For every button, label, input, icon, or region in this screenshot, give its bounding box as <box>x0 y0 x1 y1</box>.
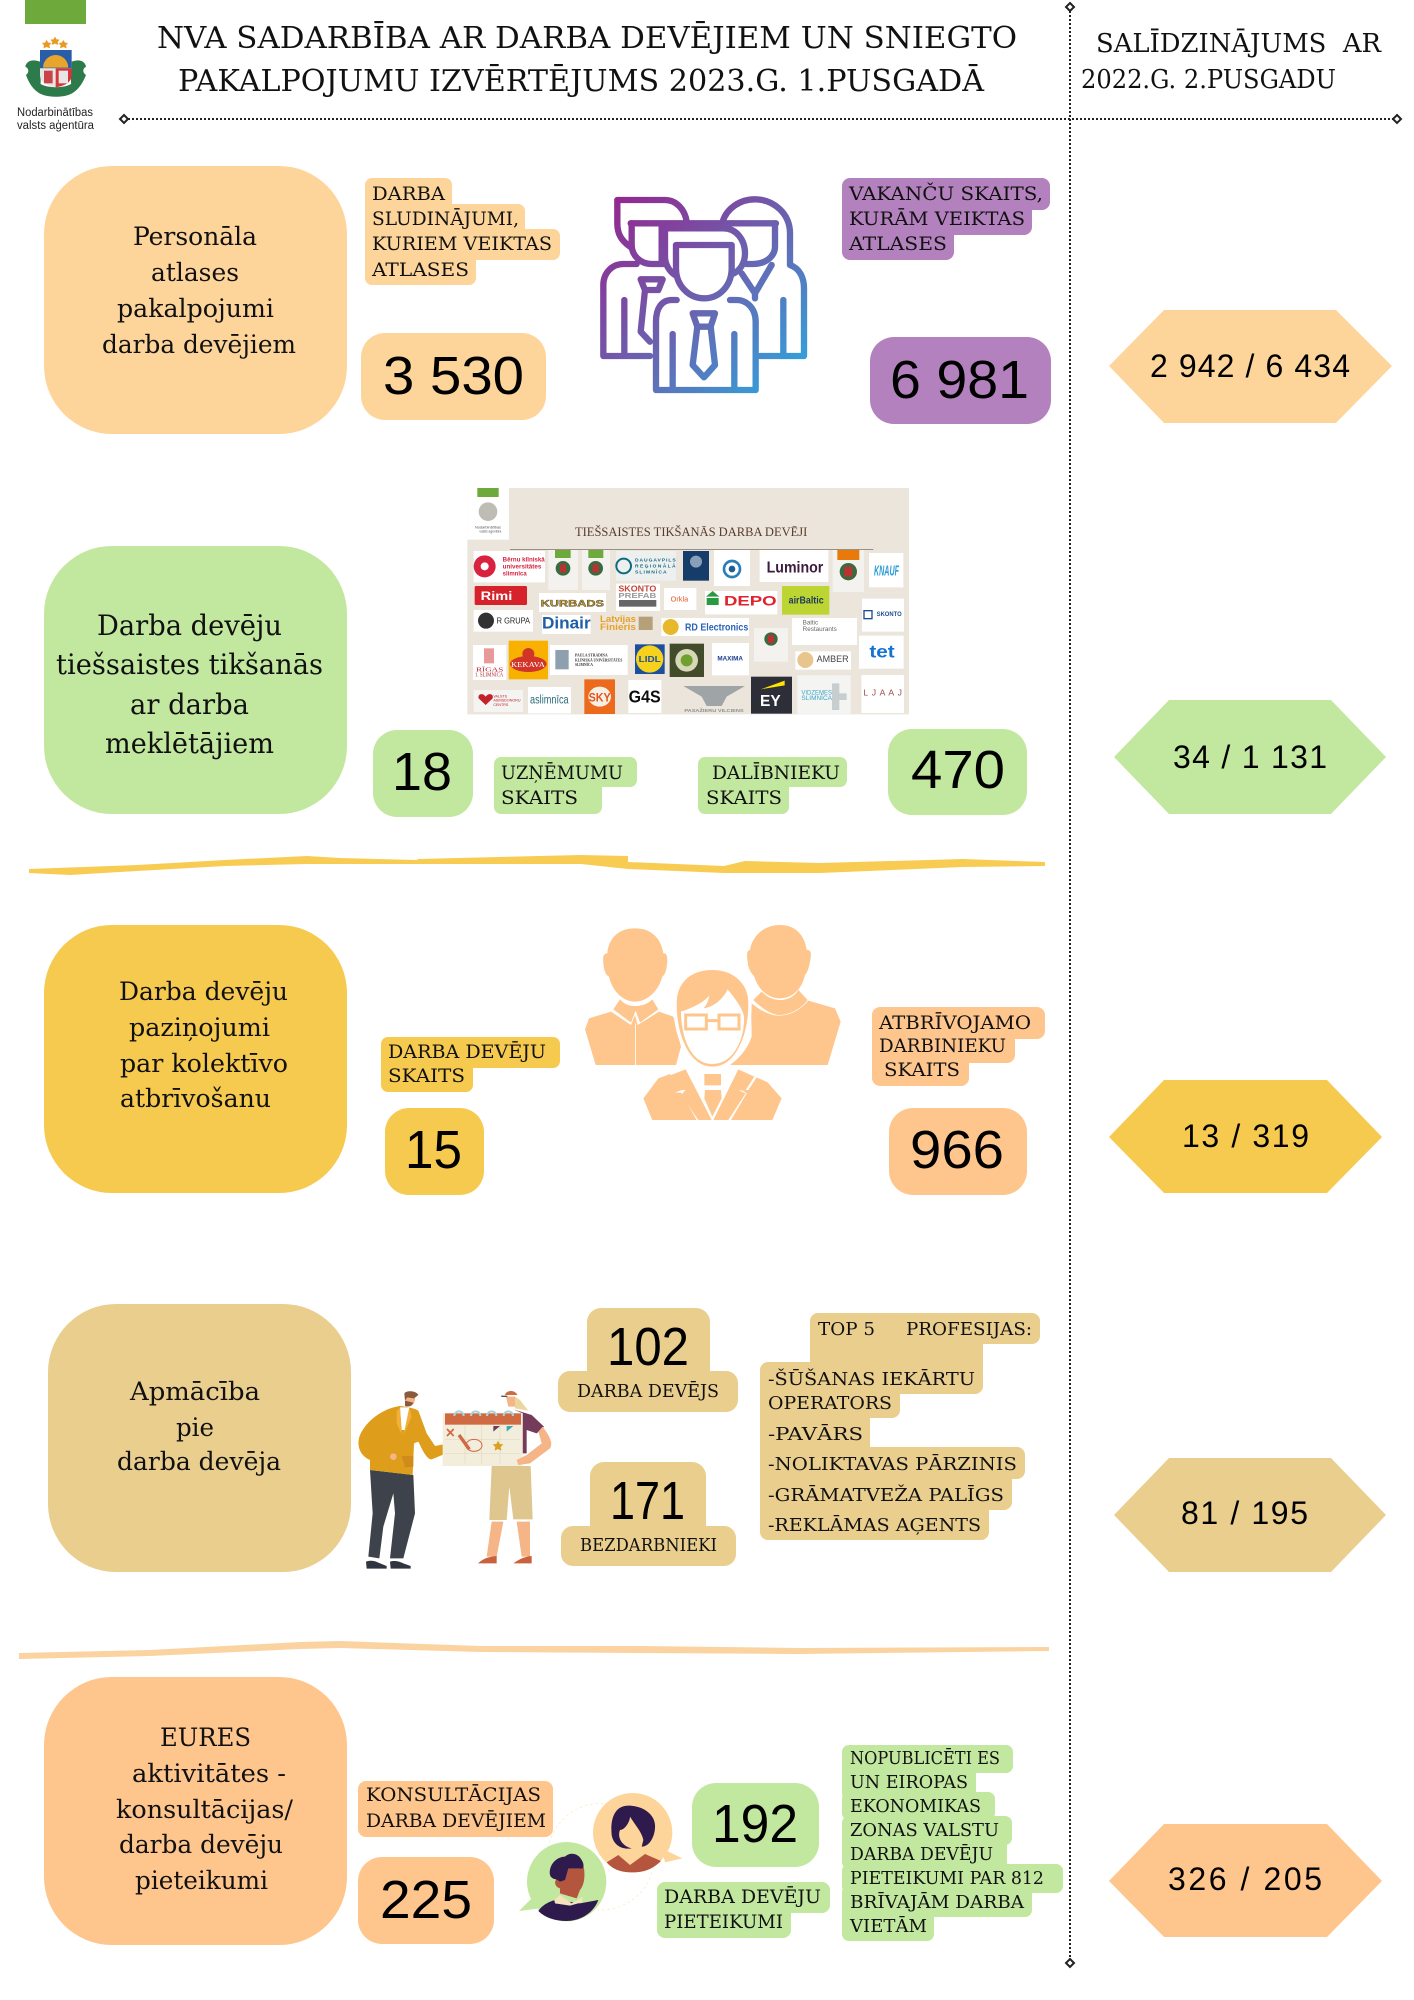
image: employer logos collage: KLĪNISKĀ UNIVERSITĀTES <box>575 657 623 662</box>
image: employer logos collage: KEKAVA <box>511 660 546 669</box>
image: employer logos collage: SLIMNĪCA <box>801 695 832 702</box>
tag: employer consultations: DARBA DEVĒJIEM <box>366 1809 546 1832</box>
text block: published EU/EEA vacancies: BRĪVAJĀM DARBA <box>850 1890 1025 1913</box>
panel: collective redundancies: par kolektīvo <box>120 1049 288 1078</box>
tag: job postings: KURIEM VEIKTAS <box>372 233 552 255</box>
image: employer logos collage: EY <box>760 693 781 710</box>
image: employer logos collage: Latvijas <box>600 614 636 624</box>
tag: companies: UZŅĒMUMU <box>501 761 623 784</box>
panel: EURES activities: darba devēju <box>119 1830 283 1859</box>
tag: employer consultations: KONSULTĀCIJAS <box>366 1783 541 1806</box>
panel: workplace training: darba devēja <box>117 1447 281 1476</box>
logo: NVA crest and agency name <box>17 0 95 132</box>
tag: vacancies <box>842 178 1050 260</box>
panel: online meetings: meklētājiem <box>105 727 274 760</box>
image: employer logos collage: PASAŽIERU VILCIENS <box>684 706 744 713</box>
image: employer logos collage: PREFAB <box>618 591 656 600</box>
tag: employer applications: DARBA DEVĒJU <box>664 1885 821 1908</box>
image: employer logos collage <box>467 488 909 714</box>
icon: group of three office workers <box>585 925 841 1120</box>
panel: EURES activities: aktivitātes - <box>132 1759 286 1788</box>
panel: collective redundancies: paziņojumi <box>129 1013 270 1042</box>
image: employer logos collage: Baltic <box>803 619 818 626</box>
panel: EURES activities <box>44 1677 347 1945</box>
image: employer logos collage: VALSTS <box>493 694 508 698</box>
number: companies: 18 <box>392 742 452 802</box>
number: released workers: 966 <box>910 1120 1004 1180</box>
number: employers count <box>385 1108 484 1195</box>
text block: published EU/EEA vacancies: DARBA DEVĒJU <box>850 1842 993 1865</box>
image: employer logos collage: KNAUF <box>874 563 900 579</box>
tag: participants <box>698 757 847 814</box>
tag: vacancies: VAKANČU SKAITS, <box>848 182 1043 205</box>
number: consultations: 225 <box>380 1870 472 1930</box>
number box: employers 102: DARBA DEVĒJS <box>577 1379 719 1402</box>
list: top 5 professions: -REKLĀMAS AĢENTS <box>768 1513 981 1536</box>
image: employer logos collage: SKY <box>589 691 611 705</box>
image: employer logos collage: RD Electronics <box>685 623 748 634</box>
comparison column heading: SALĪDZINĀJUMS AR <box>1096 28 1382 59</box>
tag: employers count: SKAITS <box>388 1065 465 1087</box>
title <box>157 21 1017 99</box>
panel: personnel selection: pakalpojumi <box>117 294 274 323</box>
image: employer logos collage: L J A A J <box>863 688 902 698</box>
panel: personnel selection: atlases <box>151 258 239 287</box>
image: employer logos collage: G4S <box>629 687 661 707</box>
comparison: online meetings <box>1114 700 1386 814</box>
tag: vacancies: ATLASES <box>848 233 947 255</box>
image: employer logos collage: SKONTO <box>618 585 656 594</box>
image: employer logos collage: LIDL <box>639 654 661 664</box>
panel: online meetings: tiešsaistes tikšanās <box>56 648 323 681</box>
icon: three business people <box>603 199 804 390</box>
tag: released workers: DARBINIEKU <box>879 1035 1006 1057</box>
image: employer logos collage: RĪGAS <box>476 666 503 673</box>
text block: published EU/EEA vacancies <box>842 1745 1063 1941</box>
image: employer logos collage: R GRUPA <box>497 616 531 625</box>
image: employer logos collage: AMBER <box>817 654 849 664</box>
image: employer logos collage: valsts aģentūra <box>479 528 501 533</box>
image: employer logos collage: universitātes <box>503 564 542 571</box>
list: top 5 professions: -GRĀMATVEŽA PALĪGS <box>768 1483 1004 1506</box>
image: employer logos collage: VIDZEMES <box>801 690 832 696</box>
comparison: personnel selection <box>1109 310 1392 423</box>
number box: employers 102 <box>558 1308 738 1412</box>
tag: job postings: SLUDINĀJUMI, <box>372 207 519 230</box>
panel: personnel selection: darba devējiem <box>102 330 296 359</box>
image: employer logos collage: Finieris <box>600 622 636 632</box>
number: job postings <box>361 333 546 420</box>
image: employer logos collage: Restaurants <box>803 626 837 633</box>
number box: unemployed 171: 171 <box>610 1471 685 1531</box>
number: vacancies: 6 981 <box>890 350 1029 410</box>
tag: employer consultations <box>358 1781 553 1837</box>
tag: companies: SKAITS <box>501 787 578 809</box>
comparison: personnel selection: 2 942 / 6 434 <box>1150 348 1350 384</box>
text block: published EU/EEA vacancies: EKONOMIKAS <box>850 1796 981 1817</box>
number: companies <box>373 730 473 817</box>
image: employer logos collage: REĢIONĀLĀ <box>635 563 676 570</box>
panel: workplace training: Apmācība <box>129 1377 260 1406</box>
text block: published EU/EEA vacancies: UN EIROPAS <box>850 1772 968 1793</box>
number: employer applications: 192 <box>712 1794 798 1854</box>
panel: online meetings: ar darba <box>130 688 249 721</box>
number: employers count: 15 <box>405 1120 462 1180</box>
icon: two speech-bubble avatars <box>519 1793 682 1921</box>
panel: personnel selection <box>44 166 347 434</box>
number: vacancies <box>870 337 1051 424</box>
image: employer logos collage: SLIMNĪCA <box>635 569 667 576</box>
illustration: two people with calendar <box>358 1391 551 1569</box>
image: employer logos collage: airBaltic <box>789 595 824 606</box>
image: employer logos collage: slimnīca <box>503 571 527 578</box>
list: top 5 professions: OPERATORS <box>768 1393 892 1414</box>
number: job postings: 3 530 <box>383 346 524 406</box>
title: PAKALPOJUMU IZVĒRTĒJUMS 2023.G. 1.PUSGADĀ <box>178 64 984 99</box>
panel: workplace training: pie <box>176 1413 214 1442</box>
image: employer logos collage: 1. SLIMNĪCA <box>475 672 504 679</box>
list: top 5 professions <box>760 1313 1040 1540</box>
panel: online meetings <box>44 546 347 814</box>
list: top 5 professions: -ŠŪŠANAS IEKĀRTU <box>768 1367 975 1390</box>
tag: job postings <box>365 178 560 285</box>
image: employer logos collage: PAULA STRADIŅA <box>575 653 608 658</box>
list: top 5 professions: TOP 5 <box>818 1319 875 1340</box>
tag: employers count <box>381 1037 560 1092</box>
panel: collective redundancies <box>44 925 347 1193</box>
list: top 5 professions: -PAVĀRS <box>768 1422 863 1445</box>
image: employer logos collage: ASINSDONORU <box>493 699 521 703</box>
tag: participants: DALĪBNIEKU <box>712 761 840 784</box>
tag: released workers: SKAITS <box>884 1059 960 1081</box>
image: employer logos collage: Bērnu klīniskā <box>503 556 545 563</box>
comparison: online meetings: 34 / 1 131 <box>1173 739 1327 775</box>
image: employer logos collage: DEPO <box>724 592 777 608</box>
panel: workplace training <box>48 1304 351 1572</box>
image: employer logos collage: CENTRS <box>493 703 509 707</box>
comparison: EURES: 326 / 205 <box>1168 1861 1322 1897</box>
panel: personnel selection: Personāla <box>133 222 257 251</box>
number: participants <box>888 729 1027 815</box>
title: NVA SADARBĪBA AR DARBA DEVĒJIEM UN SNIEGTO <box>157 21 1017 56</box>
comparison column heading: 2022.G. 2.PUSGADU <box>1081 65 1336 95</box>
text block: published EU/EEA vacancies: ZONAS VALSTU <box>850 1820 999 1841</box>
tag: employer applications <box>657 1882 830 1938</box>
tag: participants: SKAITS <box>706 787 782 809</box>
comparison: workplace training <box>1114 1458 1386 1572</box>
number: released workers <box>889 1108 1027 1195</box>
number: consultations <box>358 1857 494 1944</box>
list: top 5 professions: PROFESIJAS: <box>906 1319 1032 1340</box>
panel: collective redundancies: Darba devēju <box>119 977 288 1006</box>
image: employer logos collage: aslimnīca <box>530 692 569 706</box>
text block: published EU/EEA vacancies: PIETEIKUMI PAR 812 <box>850 1868 1044 1889</box>
tag: job postings: ATLASES <box>371 259 469 281</box>
number box: employers 102: 102 <box>607 1317 689 1377</box>
comparison: EURES <box>1109 1824 1382 1937</box>
comparison column heading <box>1081 28 1382 95</box>
tag: job postings: DARBA <box>372 183 445 205</box>
tag: employers count: DARBA DEVĒJU <box>388 1040 546 1063</box>
image: employer logos collage: SLIMNĪCA <box>575 662 593 667</box>
list: top 5 professions: -NOLIKTAVAS PĀRZINIS <box>768 1452 1017 1475</box>
image: employer logos collage: KURBADS <box>541 599 604 609</box>
text block: published EU/EEA vacancies: NOPUBLICĒTI ES <box>850 1746 1000 1769</box>
panel: EURES activities: pieteikumi <box>135 1866 268 1895</box>
image: employer logos collage: MAXIMA <box>717 656 744 662</box>
image: employer logos collage: Nodarbinātības <box>475 525 501 529</box>
image: employer logos collage: tet <box>869 641 895 661</box>
tag: released workers <box>872 1007 1045 1086</box>
image: employer logos collage: Luminor <box>767 560 823 577</box>
number box: unemployed 171: BEZDARBNIEKI <box>580 1535 717 1556</box>
panel: online meetings: Darba devēju <box>97 609 282 642</box>
panel: EURES activities: konsultācijas/ <box>116 1795 294 1824</box>
image: employer logos collage: Orkla <box>671 595 689 604</box>
tag: vacancies: KURĀM VEIKTAS <box>849 207 1025 230</box>
tag: released workers: ATBRĪVOJAMO <box>878 1011 1031 1034</box>
panel: collective redundancies: atbrīvošanu <box>120 1084 271 1113</box>
image: employer logos collage: SKONTO <box>877 612 902 618</box>
logo: NVA crest and agency name: valsts aģentūra <box>17 119 95 132</box>
panel: EURES activities: EURES <box>160 1723 251 1752</box>
number: participants: 470 <box>911 740 1005 800</box>
logo: NVA crest and agency name: Nodarbinātības <box>17 107 93 119</box>
tag: companies <box>494 757 637 814</box>
comparison: collective redundancies: 13 / 319 <box>1182 1118 1309 1154</box>
number box: unemployed 171 <box>561 1462 736 1566</box>
image: employer logos collage: TIEŠSAISTES TIKŠANĀS DARBA DEVĒJI <box>575 525 807 539</box>
image: employer logos collage: Dinair <box>542 614 591 633</box>
image: employer logos collage: Rimi <box>481 589 512 603</box>
tag: employer applications: PIETEIKUMI <box>664 1911 783 1933</box>
comparison: workplace training: 81 / 195 <box>1181 1495 1308 1531</box>
comparison: collective redundancies <box>1109 1080 1382 1193</box>
image: employer logos collage: DAUGAVPILS <box>635 558 676 564</box>
text block: published EU/EEA vacancies: VIETĀM <box>849 1914 927 1937</box>
number: employer applications <box>692 1783 819 1867</box>
